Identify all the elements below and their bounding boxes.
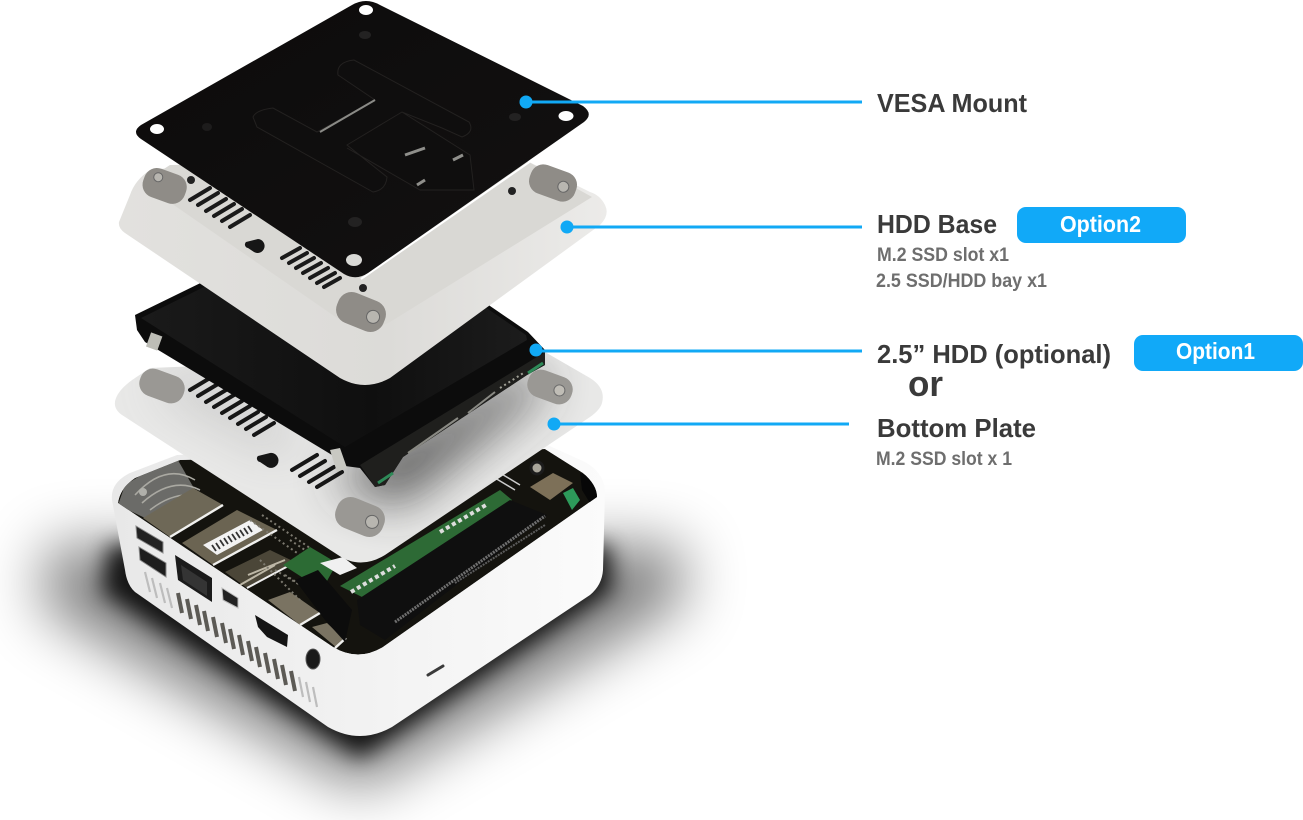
- barcode sticker: [203, 520, 263, 555]
- bottom plate: [115, 352, 603, 562]
- callout: 2.5 inch HDD: 2.5” HDD (optional): [877, 339, 1111, 369]
- black connector: [295, 570, 352, 642]
- motherboard opening: [118, 449, 600, 654]
- board components speckle: [250, 514, 310, 600]
- VESA mount plate: [136, 1, 590, 279]
- text: or: or: [908, 363, 943, 404]
- callout: HDD Base: 2.5 SSD/HDD bay x1: [876, 271, 1047, 292]
- base unit with open motherboard: [112, 443, 605, 736]
- rear connector cluster: [495, 462, 600, 510]
- keyhole: [257, 453, 279, 468]
- stamped slots: [320, 100, 375, 132]
- callout: HDD Base: [560, 209, 1047, 292]
- callout: VESA Mount: VESA Mount: [877, 88, 1027, 118]
- callout: VESA Mount: [520, 88, 1027, 118]
- bottom plate vents: [190, 378, 342, 487]
- callout: HDD Base: HDD Base: [877, 209, 997, 239]
- disk mounting brackets: [146, 332, 347, 472]
- green memory module: [340, 490, 512, 597]
- callout: Bottom Plate: Bottom Plate: [877, 413, 1036, 443]
- foot right: [524, 366, 576, 408]
- green board corner: [283, 547, 333, 581]
- panel: exploded product view: [40, 1, 685, 790]
- foot bottom: [331, 493, 389, 541]
- foot left: [136, 365, 188, 407]
- drop shadow under the base unit: [40, 545, 685, 790]
- callout: Bottom Plate: [548, 413, 1036, 470]
- heat shields: [143, 488, 346, 648]
- foot right: [525, 161, 581, 205]
- HDD base vents: [190, 188, 340, 287]
- badge: Option2: Option2: [1060, 211, 1141, 237]
- 2.5 inch hard disk: [135, 210, 545, 487]
- ports on the rear panel: [136, 526, 320, 669]
- ventilation slots: [145, 572, 317, 707]
- security lock slot: [428, 666, 443, 675]
- HDD base: [119, 160, 607, 385]
- badge: Option2: [1017, 207, 1186, 243]
- mounting holes: [150, 5, 574, 266]
- callout: 2.5 inch HDD: [530, 339, 1111, 369]
- callout: HDD Base: M.2 SSD slot x1: [877, 245, 1009, 266]
- memory slot: [362, 500, 546, 624]
- foot bottom: [332, 288, 390, 336]
- metal bracket with wires: [118, 460, 200, 518]
- badge: Option1: Option1: [1176, 338, 1255, 364]
- badge: Option1: [1134, 335, 1303, 371]
- foot left: [139, 164, 190, 208]
- callout: Bottom Plate: M.2 SSD slot x 1: [876, 449, 1012, 470]
- embossed shapes: [253, 60, 474, 192]
- shadow cast by the disk: [160, 370, 548, 505]
- keyhole: [245, 239, 265, 253]
